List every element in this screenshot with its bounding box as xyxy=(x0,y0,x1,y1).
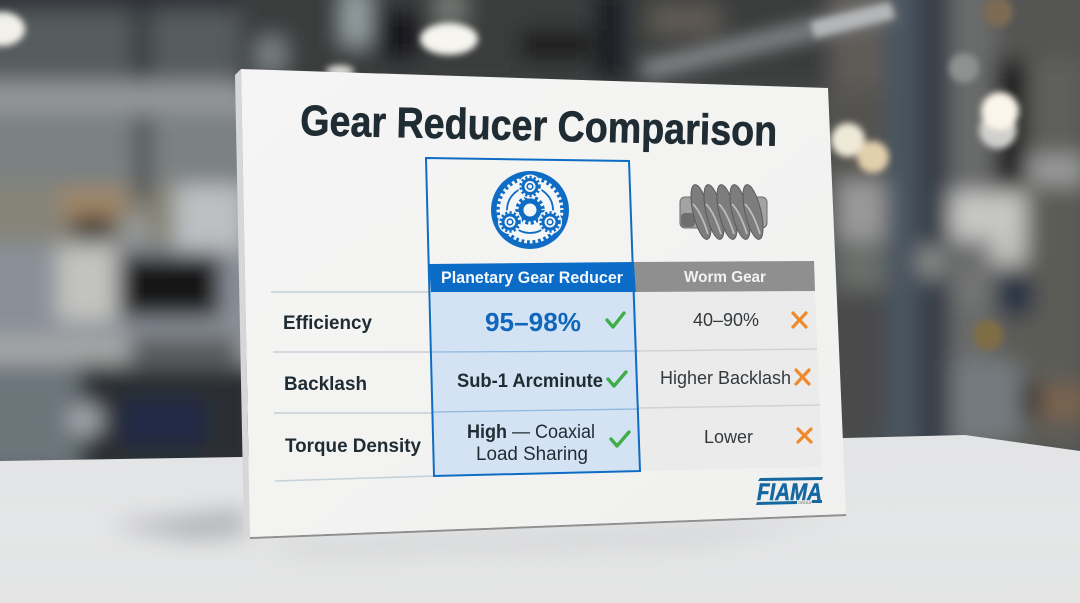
value: 40–90%: 40–90% xyxy=(693,309,759,330)
logo: FIAMA: FIAMA xyxy=(757,479,822,506)
value: lower: Lower xyxy=(704,426,753,447)
right zone xyxy=(830,0,890,90)
board side edge xyxy=(235,69,250,538)
label: efficiency: Efficiency xyxy=(283,312,372,334)
row divider lines xyxy=(271,292,435,481)
worm values xyxy=(660,309,811,447)
blurred factory background xyxy=(0,0,1080,480)
icons: orange crosses xyxy=(793,313,811,442)
icon: worm gear xyxy=(680,183,767,241)
sign board xyxy=(235,69,846,539)
top middle zone xyxy=(240,0,840,90)
label: torque density: Torque Density xyxy=(285,435,421,457)
icons: green checks xyxy=(607,313,629,446)
planetary column highlight: Planetary Gear Reducer xyxy=(441,269,624,287)
planetary column highlight xyxy=(426,158,640,476)
comparison table xyxy=(271,158,822,481)
worm column dividers xyxy=(637,349,820,408)
icon: planetary gear xyxy=(491,171,569,249)
diagonal ceiling beam xyxy=(640,2,895,80)
worm header xyxy=(634,261,815,292)
value: higher backlash: Higher Backlash xyxy=(660,367,791,388)
board front face xyxy=(241,69,846,537)
label: backlash: Backlash xyxy=(284,373,367,395)
value: sub-1 arcminute: Sub-1 Arcminute xyxy=(457,371,603,392)
value: high coaxial load sharing: High — Coaxial xyxy=(467,422,595,443)
planetary outline xyxy=(426,158,640,476)
overhead lamps and bokeh xyxy=(810,2,895,38)
worm header: Worm Gear xyxy=(684,269,766,286)
board shadow on table xyxy=(105,508,846,556)
value: 95–98%: 95–98% xyxy=(485,307,581,337)
logo: FIAMA: GROUP xyxy=(798,500,813,505)
value: high coaxial load sharing: Load Sharing xyxy=(476,444,588,465)
planetary header xyxy=(429,262,636,292)
white table surface xyxy=(0,435,1080,603)
board bottom edge xyxy=(250,514,846,539)
value: high coaxial load sharing xyxy=(467,422,595,465)
planetary values xyxy=(457,307,629,465)
worm column body xyxy=(636,291,822,471)
title: Gear Reducer Comparison xyxy=(300,97,778,156)
row labels xyxy=(283,312,421,457)
left zone xyxy=(0,0,260,10)
